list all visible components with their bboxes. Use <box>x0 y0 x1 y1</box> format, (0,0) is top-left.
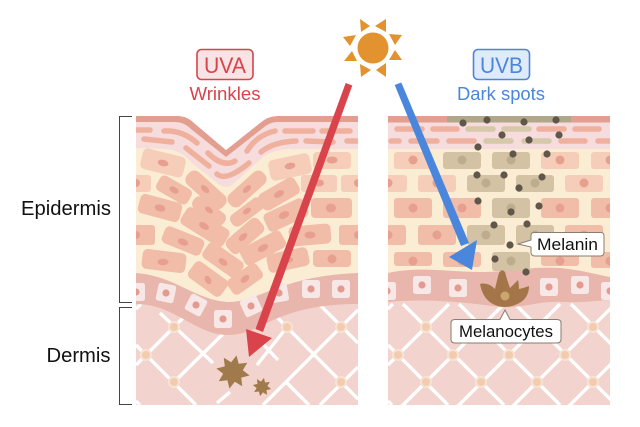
heading: UVA badge <box>197 50 253 80</box>
cream epidermis layer <box>388 140 610 277</box>
dermis lattice, broken collagen <box>136 300 358 405</box>
wrinkle notch background <box>179 116 276 150</box>
dark spot small <box>253 378 271 396</box>
basal layer band <box>388 268 610 308</box>
icon: sun <box>343 19 402 77</box>
callout: Melanocytes: Melanocytes <box>459 322 553 341</box>
basal cells <box>378 276 619 300</box>
epidermis cells <box>130 147 366 299</box>
basal layer band <box>136 273 358 335</box>
heading: Wrinkles: Wrinkles <box>190 83 260 104</box>
heading: UVB badge <box>474 50 530 80</box>
epidermis cells <box>380 152 621 271</box>
dermis nodes <box>392 321 599 388</box>
melanin-stained top band <box>447 116 571 122</box>
callout: Melanocytes <box>451 310 561 343</box>
flakes <box>391 129 610 141</box>
dermis background <box>136 304 358 405</box>
flakes <box>136 130 358 176</box>
white notch and top band <box>136 116 358 157</box>
heading: UVA badge: UVA <box>204 53 246 78</box>
heading: Dark spots: Dark spots <box>457 83 545 104</box>
stratum corneum pink layer <box>388 122 610 149</box>
arrow: UVB <box>395 82 477 270</box>
dermis nodes <box>140 321 347 388</box>
bracket: epidermis <box>120 116 132 302</box>
top band <box>388 116 610 122</box>
melanin particles <box>459 116 563 276</box>
heading: UVB badge: UVB <box>480 53 523 78</box>
dermis background <box>388 290 610 405</box>
bracket: dermis <box>120 308 132 404</box>
arrow: UVA <box>246 83 352 357</box>
panel: UVB skin cross-section <box>388 116 610 405</box>
melanocyte cell <box>480 270 529 307</box>
dermis lattice <box>388 302 610 405</box>
stratum corneum pink layer <box>136 120 358 187</box>
panel: UVA skin cross-section <box>136 116 358 405</box>
cream epidermis layer <box>136 140 358 302</box>
callout: Melanin <box>518 232 604 256</box>
label: Dermis: Dermis <box>46 345 110 367</box>
dark spot large <box>216 356 250 388</box>
callout: Melanin: Melanin <box>537 235 598 254</box>
label: Epidermis: Epidermis <box>21 198 111 220</box>
basal cells <box>127 280 350 328</box>
